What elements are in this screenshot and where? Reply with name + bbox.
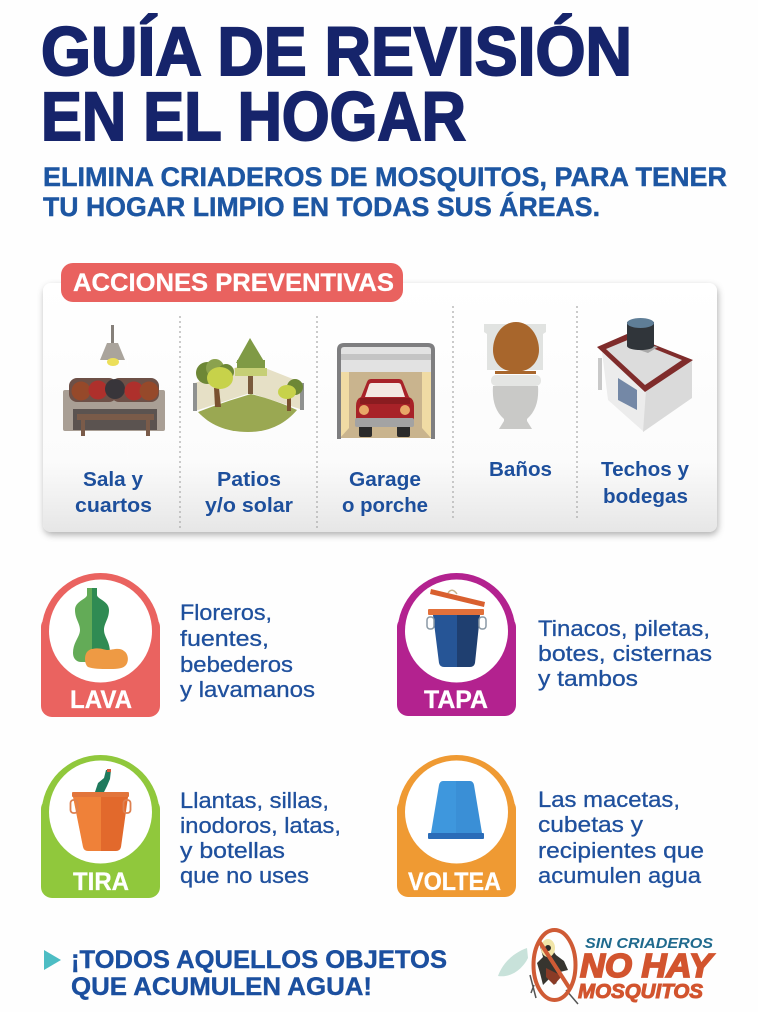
card background: [43, 283, 717, 532]
icon: techos: [597, 318, 693, 432]
badge: lava: LAVA: [70, 686, 132, 714]
icon: bucket with bottle: [70, 769, 130, 851]
text: tapa: Tinacos, piletas,: [538, 616, 710, 641]
text: tira: [180, 788, 341, 888]
icon: mosquito: [498, 930, 578, 1004]
heading pill: ACCIONES PREVENTIVAS: [73, 269, 394, 297]
icon: toilet: [484, 322, 546, 429]
icon: garage: [339, 345, 433, 439]
text: lava: bebederos: [180, 652, 293, 677]
text: tapa: [538, 616, 712, 691]
text: lava: y lavamanos: [180, 677, 315, 702]
text: tapa: botes, cisternas: [538, 641, 712, 666]
text: voltea: recipientes que: [538, 838, 704, 863]
icon: patio: [193, 338, 304, 432]
subtitle: [43, 162, 727, 222]
badge: lava: [41, 573, 160, 717]
label: garage: o porche: [342, 495, 428, 517]
logo: sin criaderos no hay mosquitos: [498, 930, 715, 1004]
closing message: QUE ACUMULEN AGUA!: [71, 973, 372, 1001]
panel: acciones preventivas: [43, 263, 717, 532]
label: patio: Patios: [217, 469, 281, 491]
label: garage: [342, 469, 428, 517]
title: EN EL HOGAR: [41, 78, 466, 155]
text: tira: y botellas: [180, 838, 285, 863]
label: sala: Sala y: [83, 469, 144, 491]
label: patio: y/o solar: [205, 495, 293, 517]
text: lava: Floreros,: [180, 600, 272, 625]
title: [41, 13, 632, 155]
text: tira: inodoros, latas,: [180, 813, 341, 838]
badge: tira: TIRA: [73, 868, 129, 896]
icon: arrow: [44, 950, 61, 970]
title: GUÍA DE REVISIÓN: [41, 13, 632, 90]
closing message: ¡TODOS AQUELLOS OBJETOS: [71, 946, 447, 974]
label: garage: Garage: [349, 469, 421, 491]
label: sala: cuartos: [75, 495, 152, 517]
label: techos: Techos y: [601, 459, 690, 481]
badge: tapa: [397, 573, 516, 716]
label: techos: [601, 459, 690, 508]
text: tapa: y tambos: [538, 666, 638, 691]
text: voltea: cubetas y: [538, 812, 643, 837]
icon: upturned bucket: [428, 781, 484, 839]
icon: bucket with lid: [427, 589, 486, 667]
text: lava: [180, 600, 315, 702]
subtitle: TU HOGAR LIMPIO EN TODAS SUS ÁREAS.: [43, 191, 600, 222]
label: patio: [205, 469, 293, 517]
icon: bottle and sponge: [73, 588, 128, 669]
label: baños: Baños: [489, 459, 552, 481]
badge: tapa: TAPA: [424, 686, 488, 714]
logo: sin criaderos no hay mosquitos: SIN CRIADEROS: [585, 935, 713, 952]
badge: voltea: VOLTEA: [408, 868, 501, 896]
badge: tira: [41, 755, 160, 898]
badge: voltea: [397, 755, 516, 897]
text: tira: que no uses: [180, 863, 309, 888]
logo: sin criaderos no hay mosquitos: MOSQUITOS: [578, 981, 704, 1003]
text: tira: Llantas, sillas,: [180, 788, 329, 813]
label: sala: [75, 469, 152, 517]
subtitle: ELIMINA CRIADEROS DE MOSQUITOS, PARA TENER: [43, 162, 727, 192]
closing message: [71, 946, 447, 1001]
text: lava: fuentes,: [180, 626, 269, 651]
icon: sala: [63, 325, 165, 436]
text: voltea: [538, 787, 704, 888]
text: voltea: Las macetas,: [538, 787, 680, 812]
logo: sin criaderos no hay mosquitos: NO HAY: [580, 947, 715, 984]
heading pill: [61, 263, 403, 302]
label: techos: bodegas: [603, 486, 688, 508]
text: voltea: acumulen agua: [538, 863, 702, 888]
